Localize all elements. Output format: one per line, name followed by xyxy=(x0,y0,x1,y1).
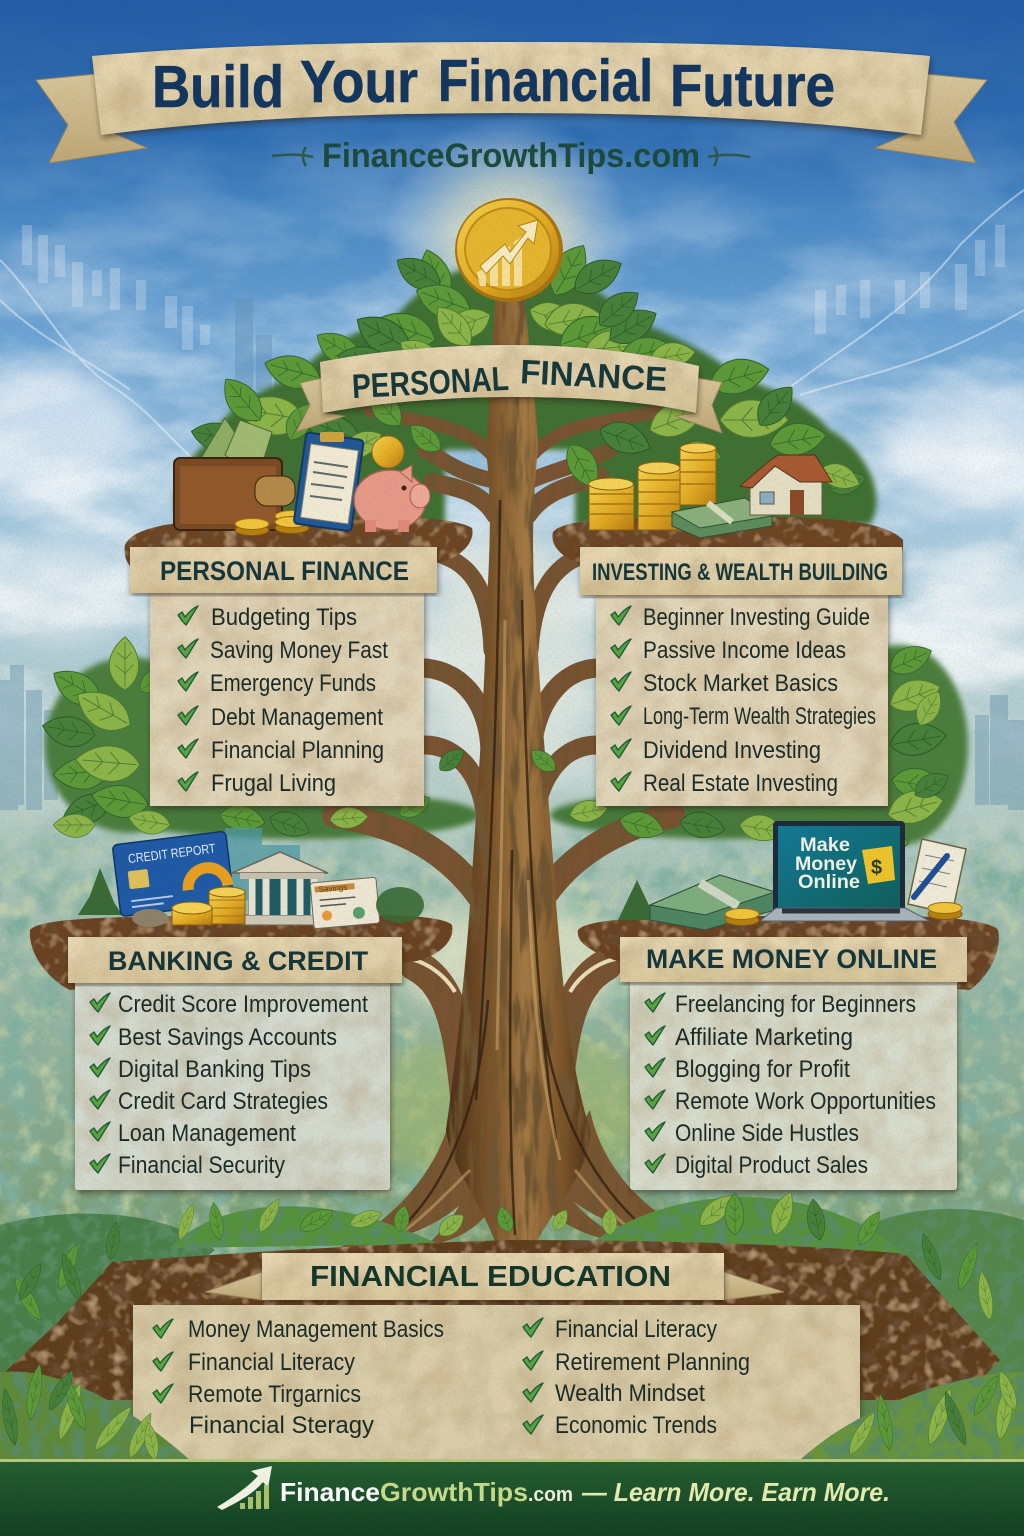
ribbon body xyxy=(320,345,699,413)
tree trunk and roots xyxy=(335,300,725,1250)
checklist: Online Side Hustles xyxy=(675,1120,859,1147)
icon: credit report card xyxy=(112,831,234,917)
checklist xyxy=(645,991,936,1179)
heading: FINANCIAL EDUCATION xyxy=(310,1261,671,1293)
checklist xyxy=(178,604,388,797)
heading: PERSONAL FINANCE xyxy=(160,556,409,586)
checklist: Long-Term Wealth Strategies xyxy=(643,703,876,730)
small shrubs xyxy=(376,887,424,923)
heading xyxy=(620,937,967,982)
ribbon text xyxy=(351,353,668,406)
ground soil xyxy=(5,1240,1000,1400)
footer text: Finance xyxy=(280,1477,380,1507)
ivory root bands xyxy=(404,958,622,992)
footer text: GrowthTips xyxy=(380,1477,528,1507)
icon: gold coin with growth arrow xyxy=(455,198,563,302)
platform soil: upper right xyxy=(552,517,903,566)
icon: piggy bank with coin xyxy=(354,436,430,532)
icon: clipboard xyxy=(294,432,364,531)
flourish right xyxy=(708,147,750,166)
sun glow behind coin xyxy=(383,115,633,365)
footer text: .com xyxy=(528,1484,573,1506)
checklist: Emergency Funds xyxy=(210,670,376,697)
icon: notepad and pen xyxy=(725,839,966,926)
checklist xyxy=(90,991,368,1179)
flourish left xyxy=(272,147,313,166)
clouds xyxy=(0,110,1024,812)
checklist: Financial Security xyxy=(118,1152,285,1179)
distant skylines xyxy=(0,665,1024,810)
footer band xyxy=(0,1459,1024,1536)
foreground grass left xyxy=(0,1363,190,1461)
icon: growth arrow xyxy=(217,1466,272,1510)
icon: house xyxy=(740,455,832,515)
platform soil: lower left xyxy=(30,915,452,990)
list card xyxy=(630,978,957,1190)
forest background xyxy=(0,818,1024,1256)
checklist: Passive Income Ideas xyxy=(643,637,846,664)
left checklist: Money Management Basics xyxy=(188,1316,444,1343)
candlestick charts and trend lines xyxy=(22,225,1005,350)
icon: wallet with cash xyxy=(174,418,309,536)
icon: small pine tree xyxy=(78,868,122,915)
list card xyxy=(150,590,424,806)
icon: laptop: Money xyxy=(795,854,857,875)
background city tiles behind bank xyxy=(225,828,300,900)
left ribbon tail xyxy=(36,74,147,163)
title text: Build xyxy=(152,54,284,120)
left checklist xyxy=(153,1316,444,1439)
checklist: Digital Product Sales xyxy=(675,1152,868,1179)
left checklist: Remote Tirgarnics xyxy=(188,1381,361,1408)
title text xyxy=(152,48,835,120)
title text: Your xyxy=(300,49,418,115)
icon: laptop: Online xyxy=(798,872,860,893)
foreground grass right xyxy=(800,1369,1024,1460)
checklist: Beginner Investing Guide xyxy=(643,604,870,631)
ribbon text: PERSONAL xyxy=(351,360,510,406)
heading xyxy=(262,1253,724,1300)
right checklist: Economic Trends xyxy=(555,1412,717,1439)
checklist: Debt Management xyxy=(211,704,383,731)
website subtitle xyxy=(272,137,750,175)
right checklist: Financial Literacy xyxy=(555,1316,717,1343)
icon: bank card xyxy=(310,877,380,929)
heading xyxy=(580,547,902,595)
heading xyxy=(68,937,402,983)
checklist: Credit Score Improvement xyxy=(118,991,368,1018)
icon: small pine tree right xyxy=(618,880,656,920)
icon: laptop: Make xyxy=(800,835,850,856)
title text: Financial xyxy=(438,48,653,114)
left checklist: Financial Steragy xyxy=(189,1412,374,1439)
footer text xyxy=(280,1477,890,1507)
checklist: Loan Management xyxy=(118,1120,296,1147)
heading: MAKE MONEY ONLINE xyxy=(646,944,937,974)
light behind trunk xyxy=(360,530,660,1190)
platform soil: lower right xyxy=(578,916,999,990)
right checklist: Wealth Mindset xyxy=(555,1380,705,1407)
checklist: Remote Work Opportunities xyxy=(675,1088,936,1115)
footer text: — Learn More. Earn More. xyxy=(581,1477,890,1507)
icon: bank building xyxy=(232,852,328,925)
left checklist: Financial Literacy xyxy=(188,1349,355,1376)
checklist: Dividend Investing xyxy=(643,737,821,764)
icon: bank card: Savings xyxy=(318,883,347,894)
panel: personal finance xyxy=(130,547,437,806)
title text: Future xyxy=(670,53,835,119)
ribbon tails xyxy=(205,1272,784,1300)
checklist: Saving Money Fast xyxy=(210,637,388,664)
right ribbon tail xyxy=(875,74,987,163)
checklist xyxy=(611,604,876,797)
ground foliage behind soil xyxy=(0,1188,1024,1395)
platform soil: upper left xyxy=(125,517,472,566)
list card xyxy=(75,978,390,1190)
icon: cash stack xyxy=(672,498,772,538)
icon: laptop xyxy=(760,821,930,921)
checklist: Affiliate Marketing xyxy=(675,1024,853,1051)
icon: credit report card: CREDIT REPORT xyxy=(127,841,216,866)
main title banner xyxy=(36,42,987,163)
list card xyxy=(133,1305,860,1460)
checklist: Credit Card Strategies xyxy=(118,1088,328,1115)
checklist: Blogging for Profit xyxy=(675,1056,850,1083)
panel: financial education xyxy=(133,1253,860,1460)
cloud banks xyxy=(0,370,1024,650)
icon: gold coin stacks xyxy=(588,443,716,530)
right checklist xyxy=(523,1316,750,1439)
panel: make money online xyxy=(620,937,967,1190)
icon: cash bundle xyxy=(650,875,775,930)
panel: banking and credit xyxy=(68,937,402,1190)
heading: INVESTING & WEALTH BUILDING xyxy=(592,559,888,586)
checklist: Best Savings Accounts xyxy=(118,1024,337,1051)
leaves xyxy=(40,237,953,856)
ribbon tails xyxy=(296,378,722,433)
checklist: Budgeting Tips xyxy=(211,604,357,631)
ribbon text: FINANCE xyxy=(519,353,668,399)
icon: coin stacks xyxy=(132,887,245,927)
banner body xyxy=(92,42,930,135)
checklist: Financial Planning xyxy=(211,737,384,764)
checklist: Freelancing for Beginners xyxy=(675,991,916,1018)
panel: investing and wealth building xyxy=(580,547,902,806)
branches xyxy=(335,410,672,1140)
checklist: Digital Banking Tips xyxy=(118,1056,311,1083)
icon: laptop: $ xyxy=(871,857,882,879)
heading xyxy=(130,547,437,593)
checklist: Real Estate Investing xyxy=(643,770,838,797)
list card xyxy=(596,592,888,806)
website name: FinanceGrowthTips.com xyxy=(322,137,700,175)
right checklist: Retirement Planning xyxy=(555,1349,750,1376)
heading: BANKING & CREDIT xyxy=(108,946,369,976)
ground plants near roots xyxy=(392,1204,617,1241)
back foliage xyxy=(45,262,968,845)
tree banner: personal finance xyxy=(296,345,722,433)
checklist: Frugal Living xyxy=(211,770,336,797)
checklist: Stock Market Basics xyxy=(643,670,838,697)
